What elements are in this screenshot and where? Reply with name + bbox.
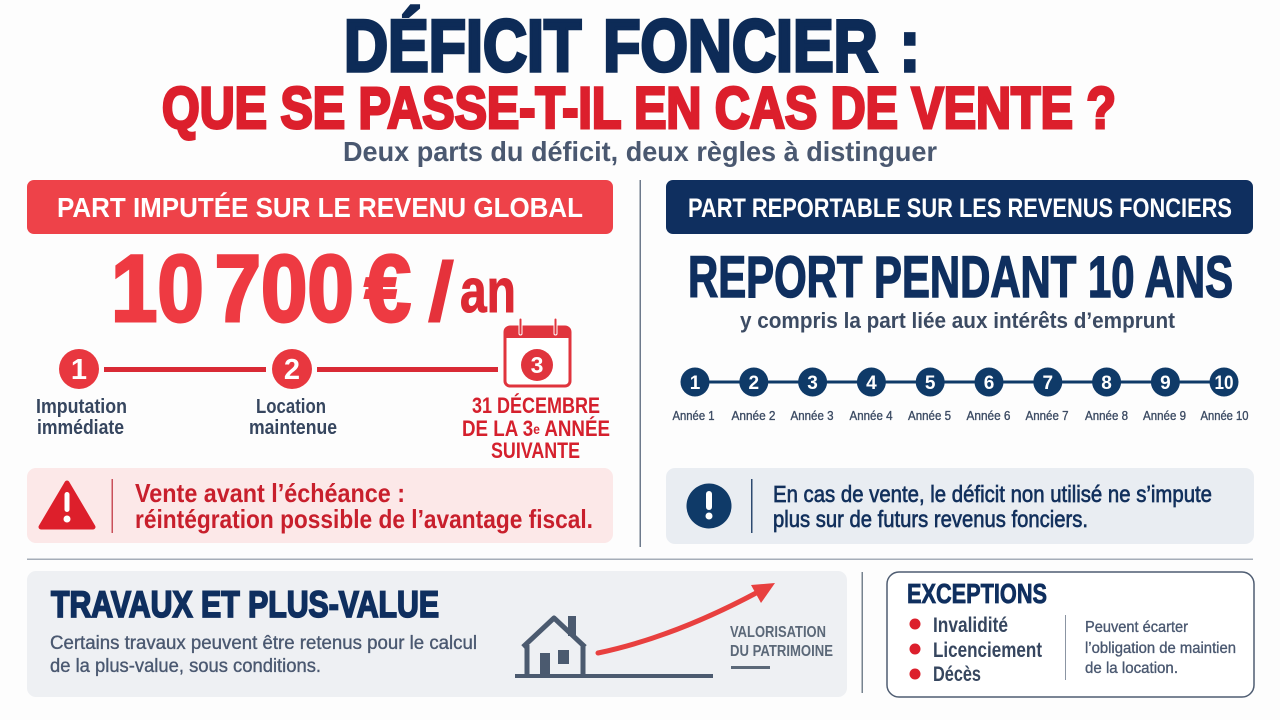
list: exceptions: Licenciement [933,639,1042,662]
icon: calendar step 3: 3 [531,352,543,378]
timeline: ten years: Année 6 [966,408,1010,423]
step labels: immédiate [37,417,124,439]
heading: travaux: TRAVAUX ET PLUS-VALUE [51,584,439,625]
panel: travaux et plus-value [27,571,847,697]
timeline: ten years: Année 4 [850,408,892,423]
panel: exceptions [887,572,1254,697]
timeline: ten years: 7 [1043,373,1053,394]
text: exceptions note: Peuvent écarter [1085,619,1189,636]
step labels: Imputation [36,396,127,418]
text: travaux [50,633,477,677]
sub-heading: y compris la part liée aux intérêts d’emprunt [740,308,1176,333]
icon: warning triangle [41,483,93,527]
step 1: 1 [71,354,87,386]
deadline label: DE LA 3 [462,416,546,441]
heading: exceptions: EXCEPTIONS [907,578,1047,609]
deadline label: e [533,421,540,437]
label: valorisation: DU PATRIMOINE [730,643,833,660]
icon: house [515,616,713,678]
label: valorisation: VALORISATION [730,624,826,641]
icon: exclamation circle [686,484,732,528]
title: QUE SE PASSE-T-IL EN CAS DE VENTE ? [162,76,1116,141]
callout: vente avant l'échéance: réintégration possible de l’avantage fiscal. [135,504,593,534]
timeline: ten years: Année 2 [732,408,776,423]
subtitle: Deux parts du déficit, deux règles à distinguer [343,136,937,167]
step labels [36,396,337,439]
text: exceptions note: l’obligation de maintien [1085,640,1236,657]
text: travaux: Certains travaux peuvent être retenus pour le calcul [50,633,477,654]
deadline label [462,393,610,463]
text: travaux: de la plus-value, sous conditions. [50,656,321,677]
list: exceptions: Décès [933,663,981,686]
big figure: an [460,257,516,326]
big figure: 10 700 € [111,236,411,342]
callout: en cas de vente [666,468,1254,544]
panel: part imputée [27,180,613,543]
title [162,6,1116,141]
list: exceptions [910,614,1042,686]
timeline: ten years: 3 [807,373,818,394]
timeline: ten years: Année 7 [1026,408,1068,423]
label: valorisation [730,624,833,669]
deadline label: 31 DÉCEMBRE [472,393,600,418]
timeline: ten years: 9 [1160,373,1171,394]
panel: part reportable [666,180,1254,544]
timeline: three steps [36,318,610,463]
step labels: maintenue [249,417,337,439]
timeline: ten years: 1 [690,373,701,394]
heading: part reportable [666,180,1253,234]
timeline: ten years: Année 5 [908,408,951,423]
icon: calendar step 3 [505,318,570,386]
text: exceptions note: de la location. [1085,660,1178,677]
timeline: ten years: Année 8 [1085,408,1128,423]
big figure: / [427,245,455,339]
step 1 [59,349,99,389]
heading: part imputée: PART IMPUTÉE SUR LE REVENU GLOBAL [57,192,583,223]
heading: part imputée [27,180,613,234]
callout: en cas de vente: plus sur de futurs revenus fonciers. [773,506,1088,532]
callout: vente avant l'échéance [27,468,613,543]
timeline: ten years: 10 [1214,373,1234,394]
step 2 [272,349,312,389]
deadline label: SUIVANTE [491,438,580,463]
timeline: ten years: Année 1 [672,408,714,423]
timeline: ten years: 6 [984,373,994,394]
step 2: 2 [284,354,300,386]
timeline: ten years: Année 9 [1143,408,1186,423]
callout: vente avant l'échéance: Vente avant l’échéance : [135,478,405,508]
text: exceptions note [1085,619,1236,677]
timeline: ten years: 4 [866,373,877,394]
arrow: rising value [598,583,775,653]
deadline label: ANNÉE [540,416,610,441]
callout: en cas de vente: En cas de vente, le déficit non utilisé ne s’impute [773,481,1212,507]
list: exceptions: Invalidité [933,614,1008,637]
timeline: ten years: 2 [749,373,759,394]
timeline: ten years: 5 [925,373,936,394]
title: DÉFICIT FONCIER : [344,6,920,87]
timeline: ten years [672,368,1248,423]
timeline: ten years: Année 10 [1200,408,1248,423]
timeline: ten years: 8 [1101,373,1112,394]
timeline: ten years: Année 3 [790,408,834,423]
step labels: Location [256,396,326,418]
